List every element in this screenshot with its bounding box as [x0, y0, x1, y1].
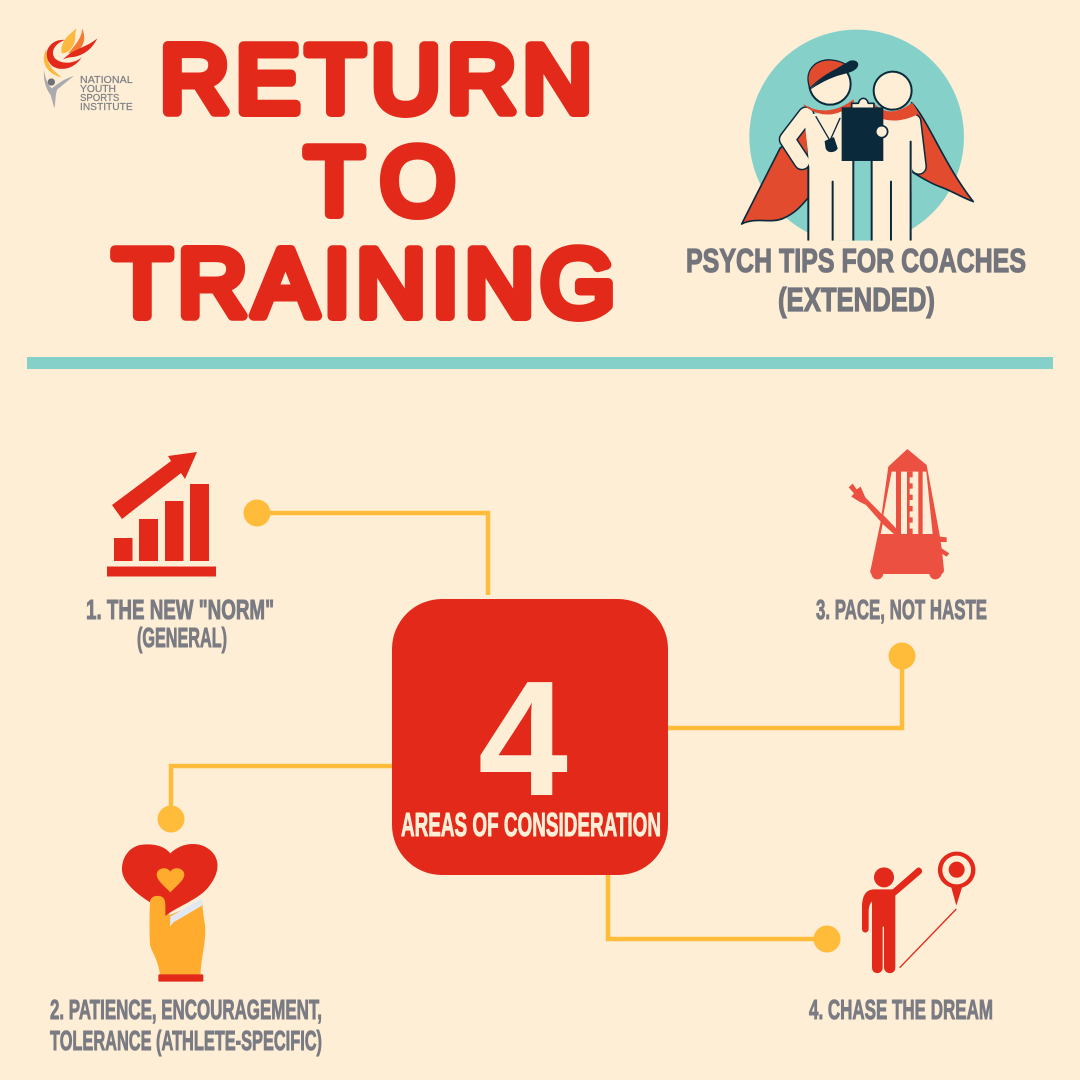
logo: National Youth Sports Institute [44, 28, 133, 113]
logo: National Youth Sports Institute: NATIONAL [80, 75, 133, 86]
icon: rising bar chart [107, 452, 216, 576]
title [113, 26, 615, 337]
connector: area 2 [158, 766, 392, 832]
logo: National Youth Sports Institute: YOUTH [80, 84, 116, 95]
label: area 1: (GENERAL) [137, 622, 227, 653]
label: area 2: TOLERANCE (ATHLETE-SPECIFIC) [50, 1025, 322, 1056]
big number 4: 4 [478, 647, 568, 830]
title: TO [305, 128, 455, 235]
title: RETURN [160, 26, 592, 133]
connector: area 4 [608, 875, 840, 952]
central panel: 4 areas of consideration [392, 599, 668, 875]
connector: area 3 [668, 642, 916, 728]
logo: National Youth Sports Institute: INSTITUTE [80, 102, 133, 113]
divider [27, 357, 1053, 369]
illustration: two coaches with capes [742, 30, 973, 244]
icon: hand holding heart [122, 844, 217, 982]
icon: person pointing at map pin [862, 852, 975, 973]
central panel: 4 areas of consideration: AREAS OF CONSIDERATION [401, 806, 661, 843]
icon: metronome [849, 449, 949, 579]
title: TRAINING [113, 230, 615, 337]
subtitle: psych tips [686, 242, 1026, 318]
subtitle: psych tips: (EXTENDED) [778, 281, 935, 318]
label: area 2 [50, 994, 322, 1056]
label: area 1 [86, 594, 274, 653]
logo: National Youth Sports Institute: SPORTS [80, 93, 119, 104]
connector: area 1 [244, 500, 488, 595]
label: area 2: 2. PATIENCE, ENCOURAGEMENT, [50, 994, 322, 1025]
label: area 1: 1. THE NEW "NORM" [86, 594, 274, 625]
